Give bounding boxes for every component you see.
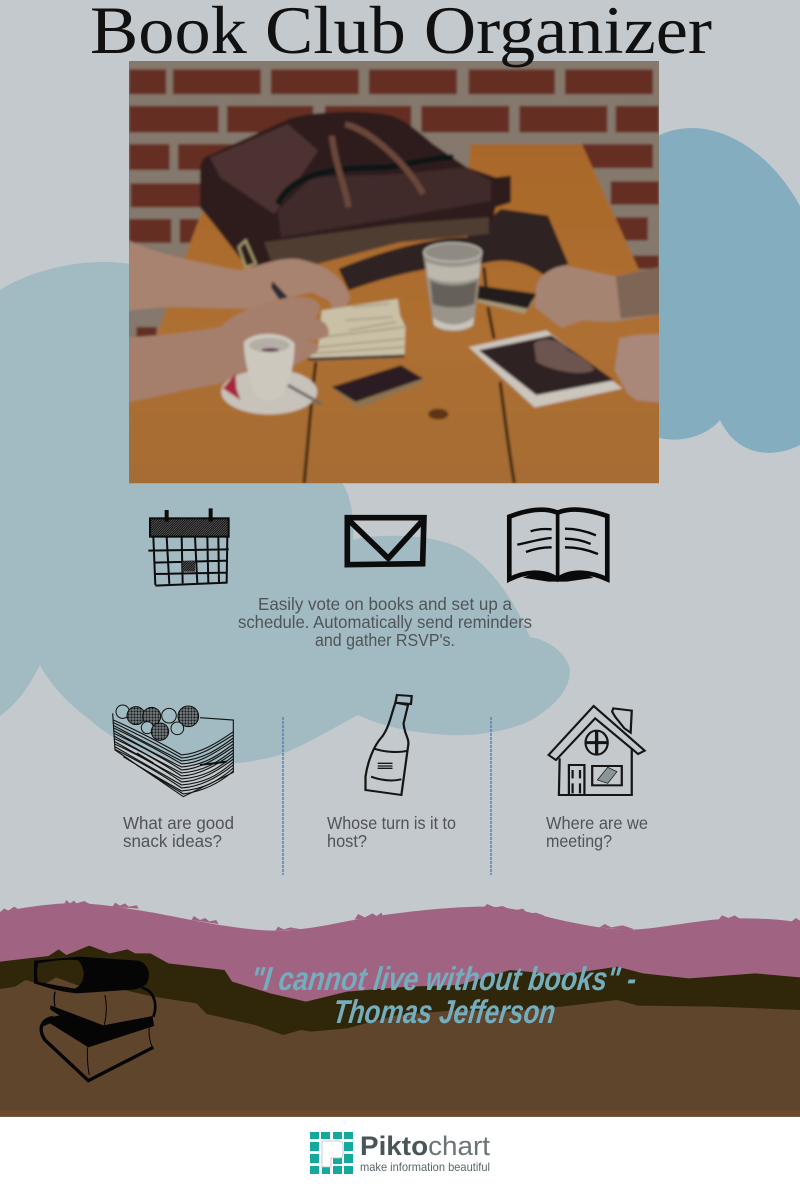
quote: Thomas Jefferson	[331, 994, 558, 1031]
right cloud	[640, 128, 800, 453]
landscape hills	[0, 900, 800, 1117]
quote: "I cannot live without books" -	[249, 961, 639, 998]
photo bag highlights	[210, 124, 491, 267]
left cloud	[0, 262, 570, 765]
text: description: and gather RSVP's.	[315, 630, 455, 650]
photo table	[129, 144, 666, 490]
purple hill	[0, 903, 800, 1117]
icon: wine bottle	[366, 695, 412, 795]
text: host turn	[327, 813, 456, 851]
grass tufts	[0, 900, 800, 931]
photo right hand	[535, 265, 666, 328]
text: host turn: Whose turn is it to	[327, 813, 456, 833]
ground strip	[0, 1110, 800, 1117]
dark ridge	[0, 946, 800, 1117]
piktochart tagline: make information beautiful	[360, 1160, 490, 1174]
text: meeting place: Where are we	[546, 813, 648, 833]
photo bag strap	[339, 209, 568, 290]
piktochart logo mark	[310, 1132, 353, 1174]
text: description	[238, 594, 532, 650]
icon: cake slice	[113, 705, 233, 797]
footer background	[0, 1117, 800, 1190]
icon: stack of books	[34, 957, 155, 1081]
photo lower right hand	[615, 334, 666, 403]
photo: people around a table	[122, 54, 666, 490]
photo table knot	[428, 409, 448, 419]
icon: envelope	[347, 518, 424, 565]
text: description: Easily vote on books and set up a	[258, 594, 512, 614]
photo notebook	[308, 299, 405, 359]
text: snack ideas: What are good	[123, 813, 234, 833]
photo cup	[242, 332, 296, 374]
icon: house	[549, 706, 645, 795]
icon: open book	[509, 510, 607, 581]
photo bag	[200, 112, 511, 267]
text: snack ideas: snack ideas?	[123, 831, 222, 851]
text: description: schedule. Automatically send reminders	[238, 612, 532, 632]
photo upper left arm	[129, 240, 352, 312]
photo table grooves	[304, 267, 514, 483]
text: snack ideas	[123, 813, 234, 851]
text: host turn: host?	[327, 831, 367, 851]
text: meeting place: meeting?	[546, 831, 612, 851]
icon: calendar	[148, 508, 229, 586]
text: meeting place	[546, 813, 648, 851]
photo second phone	[477, 285, 536, 314]
piktochart wordmark: Piktochart	[360, 1131, 491, 1161]
photo saucer	[221, 369, 322, 414]
photo right forearm hair	[615, 266, 659, 320]
quote	[249, 961, 639, 1031]
photo wall	[122, 54, 666, 490]
divider right	[490, 717, 492, 875]
photo pen	[271, 281, 288, 300]
photo glass of water	[423, 242, 482, 331]
photo lower left arm	[122, 297, 329, 403]
divider left	[282, 717, 284, 875]
brown ground	[0, 977, 800, 1117]
photo tablet	[469, 330, 622, 407]
photo phone on table	[332, 365, 425, 408]
